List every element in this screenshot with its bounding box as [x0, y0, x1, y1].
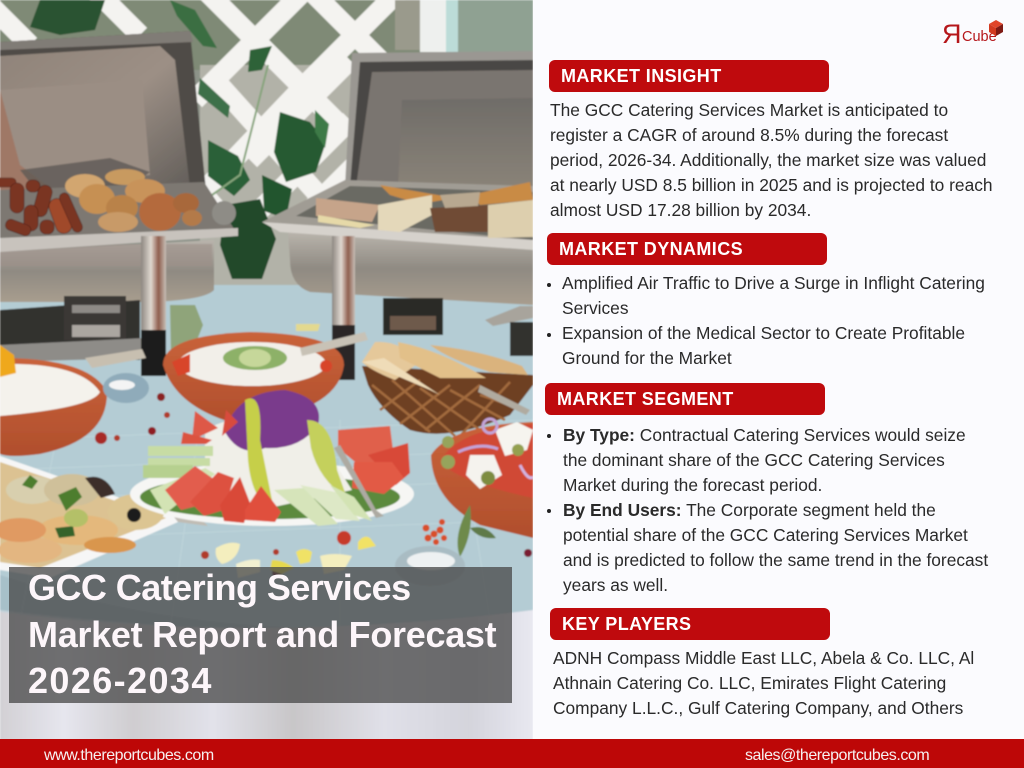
- section: market insight: [549, 60, 993, 220]
- heading: key players: KEY PLAYERS: [562, 614, 691, 634]
- section: market dynamics: [547, 233, 985, 368]
- chafing dish legs and burners: [0, 236, 533, 380]
- chafing dish: right lid: [345, 51, 533, 190]
- footer bar: [0, 739, 1024, 768]
- logo wordmark: Cube: [962, 29, 997, 45]
- text: key players list: [553, 648, 974, 718]
- text: market insight paragraph: almost USD 17.28 billion by 2034.: [550, 200, 811, 220]
- heading: market insight: [549, 60, 829, 92]
- bullets: market segment: [547, 425, 988, 595]
- logo: RCube: [942, 19, 1003, 49]
- backdrop: garden and lattice: [0, 0, 533, 300]
- bullets: market dynamics: Expansion of the Medical Sector to Create Profitable: [562, 323, 965, 343]
- title: Market Report and Forecast: [28, 614, 496, 654]
- berries, leaves and petals: [95, 393, 532, 586]
- heading: market dynamics: [547, 233, 827, 265]
- bread basket: [362, 342, 533, 436]
- small glass candle: [103, 373, 149, 403]
- title banner: [9, 567, 512, 703]
- bullets: market segment: years as well.: [563, 575, 668, 595]
- table: light blue cloth: [0, 285, 533, 640]
- footer: email: sales@thereportcubes.com: [745, 747, 929, 764]
- chafing dish: right tray with sliced meat: [262, 180, 533, 305]
- platter: canapes: [0, 456, 208, 578]
- text: market insight paragraph: period, 2026-34. Additionally, the market size was valued: [550, 150, 986, 170]
- tablecloth drape: [0, 610, 533, 740]
- bullets: market dynamics: Amplified Air Traffic to Drive a Surge in Inflight Catering: [562, 273, 985, 293]
- logo mark: mirrored R: Я: [942, 19, 962, 49]
- title: GCC Catering Services: [28, 567, 411, 608]
- heading: market segment: MARKET SEGMENT: [557, 389, 734, 409]
- heading: market segment: [545, 383, 825, 415]
- section: market segment: [545, 383, 988, 595]
- text: market insight paragraph: The GCC Catering Services Market is anticipated to: [550, 100, 948, 120]
- bullets: market segment: By Type: Contractual Catering Services would seize: [563, 425, 966, 445]
- chafing dish: left lid: [0, 31, 206, 198]
- bullets: market dynamics: Services: [562, 298, 629, 318]
- text: key players list: Company L.L.C., Gulf Catering Company, and Others: [553, 698, 963, 718]
- foliage: green plant: [30, 0, 329, 279]
- bowl: greek salad: [431, 419, 533, 538]
- footer: website: www.thereportcubes.com: [44, 747, 214, 764]
- text: market insight paragraph: [550, 100, 993, 220]
- bowl: rice with orange garnish: [0, 345, 146, 456]
- bullets: market segment: and is predicted to follow the same trend in the forecast: [563, 550, 988, 570]
- text: key players list: ADNH Compass Middle East LLC, Abela & Co. LLC, Al: [553, 648, 974, 668]
- text: key players list: Athnain Catering Co. LLC, Emirates Flight Catering: [553, 673, 946, 693]
- logo icon: red cube: [989, 20, 1003, 36]
- title: 2026-2034: [28, 660, 213, 701]
- heading: key players: [550, 608, 830, 640]
- bullets: market dynamics: [547, 273, 985, 368]
- text: market insight paragraph: at nearly USD 8.5 billion in 2025 and is projected to reach: [550, 175, 993, 195]
- title: [28, 567, 496, 701]
- bullets: market segment: By End Users: The Corporate segment held the: [563, 500, 936, 520]
- photo: catering buffet with chafing dishes and salads: [0, 0, 533, 739]
- section: key players: [550, 608, 974, 718]
- heading: market dynamics: MARKET DYNAMICS: [559, 239, 743, 259]
- chafing dish: left tray with sausages and patties: [0, 169, 238, 302]
- plate: vegetable salad: [130, 390, 414, 526]
- text: market insight paragraph: register a CAGR of around 8.5% during the forecast: [550, 125, 948, 145]
- bullets: market segment: Market during the forecast period.: [563, 475, 822, 495]
- bullets: market segment: potential share of the GCC Catering Services Market: [563, 525, 968, 545]
- bullets: market dynamics: Ground for the Market: [562, 348, 732, 368]
- heading: market insight: MARKET INSIGHT: [561, 66, 722, 86]
- bowl: rice with cucumber rose: [163, 332, 368, 422]
- bullets: market segment: the dominant share of the GCC Catering Services: [563, 450, 945, 470]
